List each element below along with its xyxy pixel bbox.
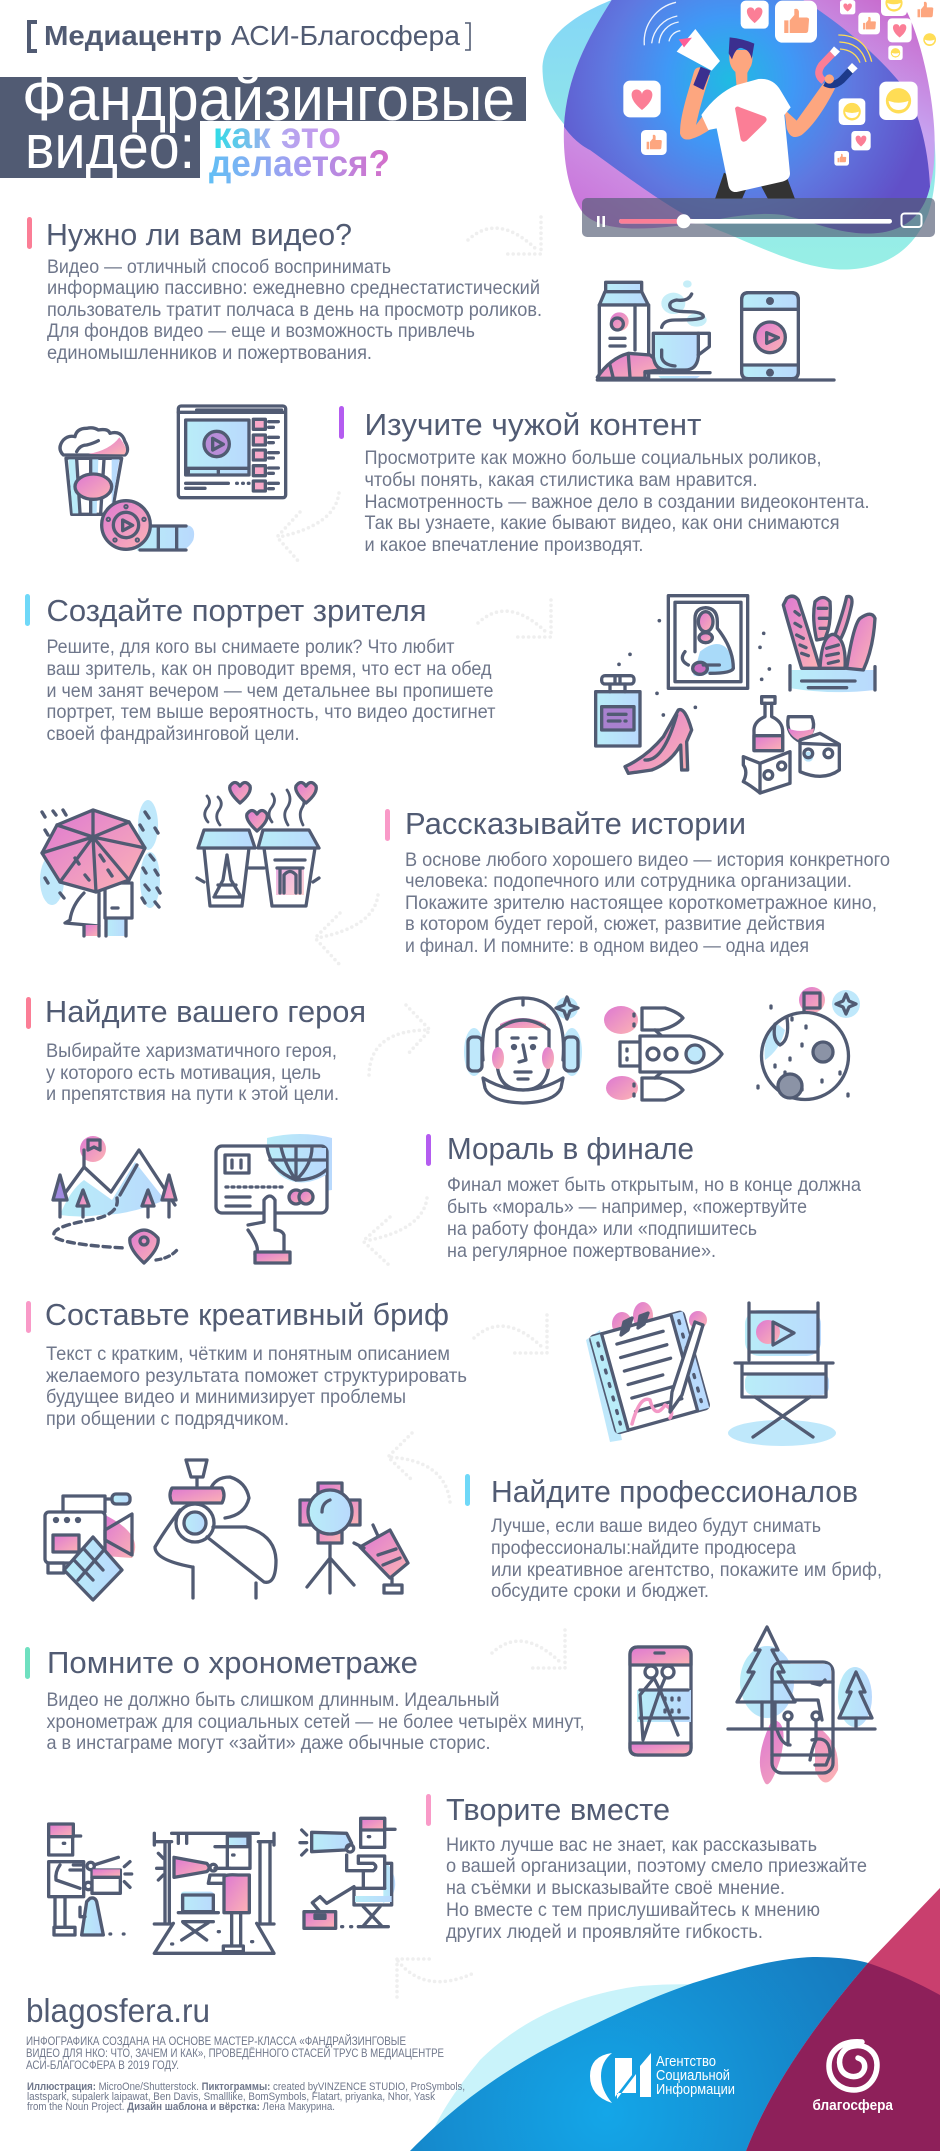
logo: social information agency: Агентство [656,2053,716,2070]
title block: как это [213,115,341,156]
body text: Но вместе с тем прислушивайтесь к мнению [446,1899,820,1921]
body text: информацию пассивно: ежедневно среднестатистический [47,277,540,299]
body text: и чем занят вечером — чем детальнее вы пропишете [46,680,494,702]
body text: Просмотрите как можно больше социальных роликов, [364,447,822,469]
icon: phone with scissors cutting film [630,1647,691,1755]
icon: milk, coffee, croissant, phone [597,280,834,380]
body text: Решите, для кого вы снимаете ролик? Что любит [46,636,455,658]
heading: Составьте креативный бриф [45,1297,449,1332]
heading: Создайте портрет зрителя [46,593,426,628]
body text: и финал. И помните: в одном видео — одна идея [405,935,809,957]
accent bar [27,217,32,249]
body text: Лучше, если ваше видео будут снимать [491,1515,821,1537]
body text: о вашей организации, поэтому смело приезжайте [446,1855,867,1877]
title block: делается? [209,143,390,184]
body text: в котором будет герой, сюжет, развитие действия [405,913,825,935]
body text [46,636,496,745]
logo: social information agency: Информации [656,2081,735,2098]
body text [491,1515,882,1602]
panel: step 1 do you need video [27,217,834,380]
body text: Никто лучше вас не знает, как рассказывать [446,1834,817,1856]
panel: step 4 tell stories [40,782,890,957]
logo: blagosfera spiral [812,2042,894,2114]
body text: Так вы узнаете, какие бывают видео, как они снимаются [364,512,840,534]
body text: других людей и проявляйте гибкость. [446,1921,763,1943]
hero background blobs [543,0,935,270]
icon: couple under umbrella in rain [40,800,160,936]
hero illustration [543,0,939,270]
heading: Помните о хронометраже [47,1645,418,1680]
director with megaphone [154,1833,274,1953]
icon: script on film strip [586,1302,709,1442]
body text: или креативное агентство, покажите им бриф, [491,1559,882,1581]
footer: source note: ВИДЕО ДЛЯ НКО: ЧТО, ЗАЧЕМ И КАК», ПРОВЕДЁННОГО СТАСЕЙ ТРУС В МЕДИАЦЕНТРЕ [26,2045,444,2060]
body text [46,1040,339,1105]
body text: Насмотренность — важное дело в создании видеоконтента. [364,491,870,513]
arrow: step 10 to footer [397,1959,474,1997]
body text: на регулярное пожертвование». [447,1240,716,1262]
panel: step 6 moral in the finale [53,1131,861,1263]
title block: Фандрайзинговые [22,65,515,134]
accent bar [25,1647,30,1679]
icon: astronaut [464,997,582,1103]
body text: а в инстаграме могут «зайти» даже обычные сторис. [46,1732,490,1754]
body text: и препятствия на пути к этой цели. [46,1083,339,1105]
body text: единомышленников и пожертвования. [47,342,372,364]
body text: Видео — отличный способ воспринимать [47,256,391,278]
body text: Покажите зрителю настоящее короткометражное кино, [405,892,877,914]
arrow: step 8 to step 9 [388,1433,450,1502]
header: media centre label: АСИ-Благосфера [231,20,460,51]
icon: popcorn, film reel, video browser [60,406,286,551]
footer: source note: ИНФОГРАФИКА СОЗДАНА НА ОСНОВЕ МАСТЕР-КЛАССА «ФАНДРАЙЗИНГОВЫЕ [26,2033,406,2048]
icon: film crew [49,1818,395,1953]
seated camera operator [300,1818,395,1928]
body text: человека: подопечного или сотрудника организации. [405,870,852,892]
icon: director chair [728,1303,836,1446]
icon: coffee cups with hearts [197,782,319,906]
arrow: step 4 to step 5 [315,895,378,964]
accent bar [385,809,390,841]
body text: своей фандрайзинговой цели. [46,723,300,745]
body text: желаемого результата поможет структурировать [46,1365,467,1387]
arrow: step 3 to step 4 [478,600,551,637]
body text: портрет, тем выше вероятность, что видео достигнет [46,701,496,723]
arrow: step 6 to step 7 [363,1198,427,1266]
reaction tiles [623,0,939,166]
body text [364,447,870,556]
heading: Рассказывайте истории [405,806,746,841]
body text: и какое впечатление производят. [364,534,644,556]
body text: на съёмки и высказывайте своё мнение. [446,1877,785,1899]
crew member with clapperboard [49,1824,132,1935]
body text [447,1174,861,1262]
body text: быть «мораль» — например, «пожертвуйте [447,1196,807,1218]
body text: пользователь тратит полчаса в день на просмотр роликов. [47,299,542,321]
title block [0,65,526,184]
accent bar [26,1301,31,1333]
body text [46,1689,584,1754]
man with megaphone and magnet [644,2,872,199]
body text [46,1343,467,1430]
accent bar [339,406,344,439]
panel: step 10 create together [49,1792,867,1953]
logo: social information agency [590,2053,735,2103]
heading: Найдите вашего героя [45,994,366,1029]
title block: видео: [25,113,195,182]
body text: будущее видео и минимизирует проблемы [46,1386,406,1408]
icon: phone with trees and snail [728,1627,875,1784]
body text [47,256,542,364]
body text [405,849,890,957]
panel: step 3 viewer portrait [25,593,875,793]
body text: Текст с кратким, чётким и понятным описанием [46,1343,450,1365]
panel: step 5 find your hero [26,987,860,1105]
icon: studio light and lamp [300,1483,408,1593]
footer: source note: АСИ-БЛАГОСФЕРА В 2019 ГОДУ. [26,2058,179,2072]
heading: Нужно ли вам видео? [46,217,352,252]
icon: photographer [155,1460,276,1598]
body text: чтобы понять, какая стилистика вам нравится. [364,469,758,491]
body text: Для фондов видео — еще и возможность привлечь [47,320,475,342]
panel: step 2 study others' content [60,406,870,556]
logo: social information agency: Социальной [656,2067,730,2084]
accent bar [426,1794,431,1826]
accent bar [25,594,30,626]
panel: step 8 find professionals [45,1460,882,1602]
icon: credit card with globe and hand [216,1134,332,1263]
panel: step 9 remember duration [25,1627,875,1784]
icon: rocket [604,1006,722,1100]
body text: Финал может быть открытым, но в конце должна [447,1174,861,1196]
heading: Изучите чужой контент [364,407,702,442]
header: media centre label: Медиацентр [44,20,222,51]
logo: blagosfera spiral: благосфера [812,2097,894,2114]
heading: Творите вместе [446,1792,670,1827]
arrow: step 7 to step 8 [474,1315,547,1353]
body text: хронометраж для социальных сетей — не более четырёх минут, [46,1711,584,1733]
body text: ваш зритель, как он проводит время, что ест на обед [46,658,492,680]
footer background shapes [410,1888,940,2151]
body text: В основе любого хорошего видео — история конкретного [405,849,890,871]
icon: planet with flag [758,987,860,1100]
body text [446,1834,867,1943]
arrow: step 5 to step 6 [369,1005,430,1075]
heading: Мораль в финале [447,1131,694,1166]
body text: при общении с подрядчиком. [46,1408,289,1430]
body text: Выбирайте харизматичного героя, [46,1040,337,1062]
panel: step 7 creative brief [26,1297,836,1446]
body text: на работу фонда» или «подпишитесь [447,1218,757,1240]
arrow: step 2 to step 3 [277,493,339,563]
accent bar [426,1134,431,1166]
body text: обсудите сроки и бюджет. [491,1580,709,1602]
header: media centre label [29,20,470,51]
body text: профессионалы:найдите продюсера [491,1537,796,1559]
icon: painting, baguettes, perfume, shoe, wine and cheese [596,596,875,793]
footer: credits [27,2081,465,2113]
body text: Видео не должно быть слишком длинным. Идеальный [46,1689,500,1711]
accent bar [26,997,31,1029]
footer: source note [26,2033,444,2072]
body text: у которого есть мотивация, цель [46,1062,321,1084]
icon: mountains, trees and route [53,1136,177,1263]
accent bar [465,1474,470,1506]
arrow: step 9 to step 10 [492,1630,565,1668]
footer: credits: lastspark, supalerk laipawat, Ben Davis, Smalllike, BomSymbols, Flatart, priyanka, Nhor, Yask [27,2091,435,2103]
footer: credits: Иллюстрация: MicroOne/Shutterstock. Пиктограммы: created byVINZENCE STUDIO, ProSymbols, [27,2081,465,2093]
heading: Найдите профессионалов [491,1474,858,1509]
icon: video camera and film [45,1494,135,1600]
footer: credits: from the Noun Project. Дизайн шаблона и вёрстка: Лена Макурина. [27,2101,335,2113]
footer: site address: blagosfera.ru [26,1992,210,2029]
video player bar [582,198,935,237]
arrow: step 1 to step 2 [468,217,541,254]
